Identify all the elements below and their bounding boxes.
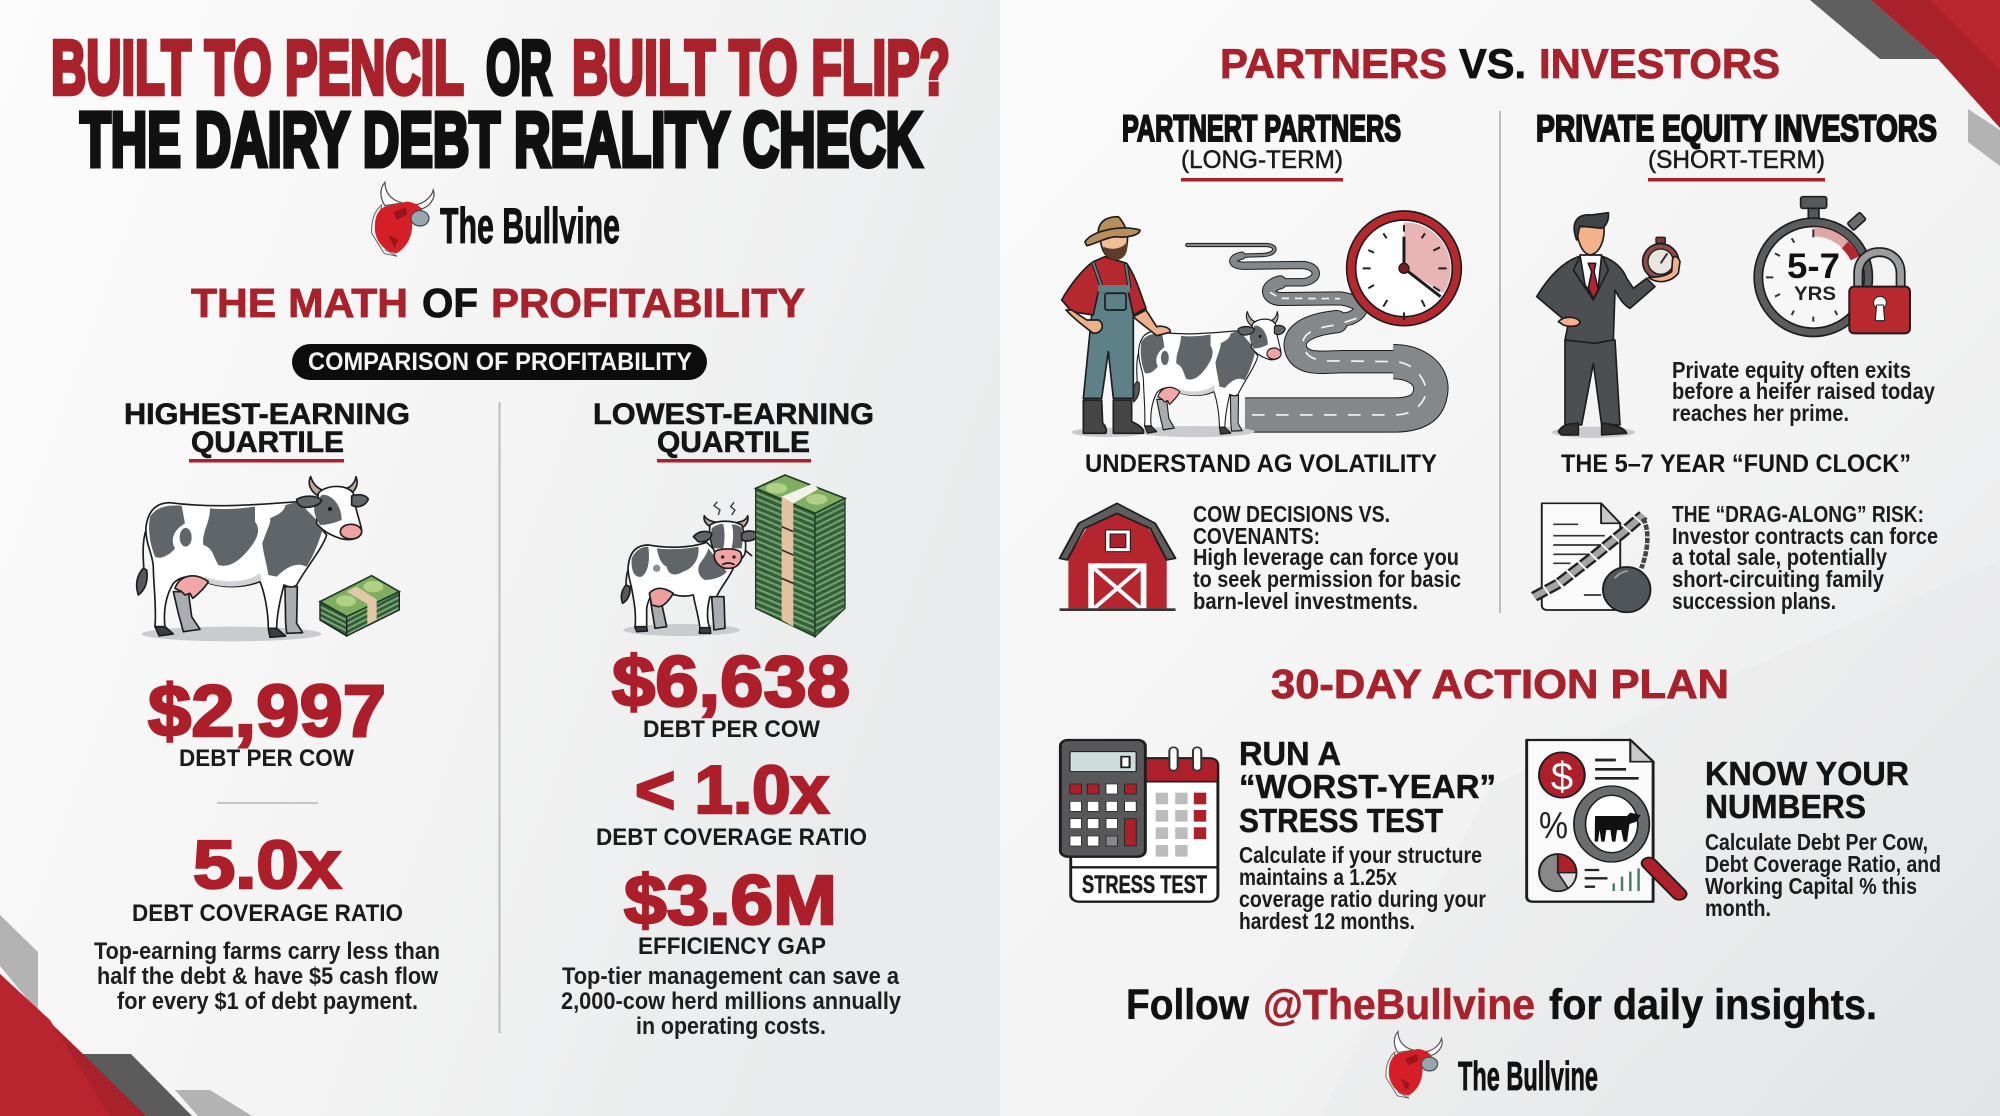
stat: debt coverage ratio under 1.0x: < 1.0x [635, 752, 829, 828]
title: BUILT TO PENCIL [51, 25, 464, 111]
logo: The Bullvine (top) [372, 182, 620, 256]
text: stress test description: Calculate if your structure [1239, 842, 1482, 868]
text: stress test description: coverage ratio during your [1239, 886, 1486, 912]
panel: lowest-earning quartile [561, 398, 902, 1040]
background: left panel [0, 0, 1000, 1116]
text: top-tier management explanation [561, 963, 902, 1040]
stat: debt coverage ratio under 1.0x [596, 752, 867, 851]
column heading: highest-earning quartile [124, 398, 410, 462]
text: private equity exit note: reaches her prime. [1672, 400, 1849, 426]
text: the drag-along risk: succession plans. [1672, 588, 1836, 614]
heading: 30-day action plan: 30-DAY ACTION PLAN [1271, 661, 1729, 707]
icon: red barn [1060, 503, 1176, 611]
heading: the math of profitability: THE MATH [191, 280, 408, 326]
text: cow decisions vs. covenants [1193, 501, 1461, 614]
icon: report with magnifier: $ [1551, 755, 1573, 799]
heading: partners vs. investors [1220, 40, 1780, 87]
icon: report with magnifier [1527, 740, 1679, 902]
icon: padlock [1849, 252, 1910, 333]
text: top-earning farms explanation [94, 938, 440, 1015]
text: the drag-along risk: short-circuiting family [1672, 566, 1884, 592]
panel: highest-earning quartile [94, 398, 440, 1015]
heading: know your numbers: NUMBERS [1705, 788, 1866, 825]
text: know your numbers description [1705, 829, 1941, 921]
stat: debt per cow $2,997: $2,997 [148, 671, 386, 752]
heading: partners vs. investors: VS. [1459, 40, 1526, 87]
column heading: highest-earning quartile: HIGHEST-EARNING [124, 398, 410, 431]
stat: debt per cow $6,638: $6,638 [612, 643, 850, 722]
heading: the math of profitability: OF [422, 280, 478, 326]
heading: know your numbers: KNOW YOUR [1705, 755, 1909, 792]
logo: The Bullvine (bottom) [1386, 1032, 1598, 1099]
column heading: lowest-earning quartile [593, 398, 874, 462]
text: the drag-along risk [1672, 501, 1938, 614]
column heading: private equity investors short-term [1536, 108, 1937, 182]
text: top-earning farms explanation: for every $1 of debt payment. [117, 988, 418, 1015]
illustration: farmer [1062, 217, 1170, 437]
text: top-earning farms explanation: Top-earning farms carry less than [94, 938, 440, 965]
text: know your numbers description: Debt Coverage Ratio, and [1705, 851, 1941, 877]
heading: the math of profitability [191, 280, 805, 326]
text: stress test description: maintains a 1.25x [1239, 864, 1397, 890]
text: cow decisions vs. covenants: barn-level investments. [1193, 588, 1418, 614]
column heading: partners long-term [1122, 108, 1401, 182]
corner decoration: bottom left [0, 915, 252, 1116]
text: top-earning farms explanation: half the debt & have $5 cash flow [97, 963, 438, 990]
call to action: follow the bullvine: @TheBullvine [1263, 981, 1535, 1029]
corner decoration: top right [1810, 0, 2000, 166]
pill label: comparison of profitability: COMPARISON OF PROFITABILITY [308, 348, 692, 376]
illustration: businessman with stopwatch [1537, 213, 1680, 438]
title: BUILT TO FLIP? [572, 25, 950, 111]
illustration: winding road [1187, 245, 1431, 415]
text: private equity exit note: before a heifer raised today [1672, 378, 1935, 404]
illustration: 5-7 year stopwatch [1758, 197, 1868, 332]
text: cow decisions vs. covenants: COVENANTS: [1193, 523, 1320, 549]
logo: The Bullvine (bottom): The Bullvine [1458, 1053, 1598, 1099]
text: stress test description [1239, 842, 1486, 934]
heading: the math of profitability: PROFITABILITY [491, 280, 805, 326]
column heading: partners long-term: PARTNERT PARTNERS [1122, 108, 1401, 149]
text: private equity exit note: Private equity often exits [1672, 357, 1911, 383]
heading: partners vs. investors: PARTNERS [1220, 40, 1447, 87]
column heading: highest-earning quartile: QUARTILE [191, 426, 344, 459]
icon: calculator and calendar: STRESS TEST [1082, 871, 1207, 899]
heading: run a worst-year stress test: “WORST-YEAR” [1239, 768, 1496, 805]
text: the drag-along risk: THE “DRAG-ALONG” RISK: [1672, 501, 1924, 527]
stat: debt coverage ratio under 1.0x: DEBT COVERAGE RATIO [596, 824, 867, 851]
stat: efficiency gap $3.6M: EFFICIENCY GAP [638, 933, 826, 960]
text: cow decisions vs. covenants: COW DECISIONS VS. [1193, 501, 1390, 527]
icon: calculator and calendar [1060, 740, 1218, 902]
illustration: 5-7 year stopwatch: 5-7 [1787, 247, 1840, 286]
title [51, 25, 950, 183]
action item: worst-year stress test [1060, 735, 1496, 934]
text: cow decisions vs. covenants: to seek permission for basic [1193, 566, 1461, 592]
text: cow decisions vs. covenants: High leverage can force you [1193, 544, 1459, 570]
stat: efficiency gap $3.6M: $3.6M [624, 861, 837, 939]
heading: run a worst-year stress test: STRESS TEST [1239, 802, 1443, 839]
illustration: 5-7 year stopwatch: YRS [1794, 284, 1836, 305]
background: right panel [1000, 0, 2000, 1116]
text: private equity exit note [1672, 357, 1935, 426]
text: top-tier management explanation: in operating costs. [636, 1013, 826, 1040]
illustration: cow [137, 477, 368, 641]
text: top-tier management explanation: 2,000-cow herd millions annually [561, 988, 902, 1015]
text: know your numbers description: month. [1705, 895, 1771, 921]
label: understand ag volatility: UNDERSTAND AG VOLATILITY [1085, 450, 1437, 478]
stat: debt per cow $2,997: DEBT PER COW [179, 745, 354, 772]
text: stress test description: hardest 12 months. [1239, 908, 1415, 934]
illustration: cow beside farmer [1132, 312, 1285, 437]
column heading: lowest-earning quartile: LOWEST-EARNING [593, 398, 874, 431]
title: THE DAIRY DEBT REALITY CHECK [80, 97, 922, 183]
heading: know your numbers [1705, 755, 1909, 825]
call to action: follow the bullvine [1126, 981, 1877, 1029]
text: the drag-along risk: Investor contracts can force [1672, 523, 1938, 549]
panel: short-term private equity investors [1534, 108, 1938, 614]
column heading: lowest-earning quartile: QUARTILE [657, 426, 810, 459]
stat: debt coverage ratio 5.0x [132, 827, 403, 927]
text: know your numbers description: Calculate Debt Per Cow, [1705, 829, 1928, 855]
column heading: private equity investors short-term: (SHORT-TERM) [1648, 146, 1825, 174]
heading: run a worst-year stress test: RUN A [1239, 735, 1341, 772]
icon: small cash stack [320, 576, 399, 636]
stat: debt per cow $6,638: DEBT PER COW [643, 716, 820, 743]
action item: know your numbers [1527, 740, 1941, 921]
icon: report with magnifier: % [1539, 805, 1568, 847]
text: know your numbers description: Working Capital % this [1705, 873, 1917, 899]
label: the 5-7 year fund clock: THE 5–7 YEAR “FUND CLOCK” [1561, 450, 1911, 478]
heading: run a worst-year stress test [1239, 735, 1496, 839]
column heading: partners long-term: (LONG-TERM) [1181, 146, 1343, 174]
text: top-tier management explanation: Top-tier management can save a [562, 963, 900, 990]
title: OR [486, 25, 552, 111]
panel: long-term partners [1060, 108, 1461, 614]
icon: contract with chain and ball [1534, 503, 1650, 612]
illustration: clock [1347, 211, 1461, 326]
call to action: follow the bullvine: Follow [1126, 981, 1249, 1029]
illustration: stressed cow [621, 502, 759, 636]
stat: debt coverage ratio 5.0x: 5.0x [193, 827, 341, 903]
icon: tall cash stack [756, 475, 845, 637]
stat: debt coverage ratio 5.0x: DEBT COVERAGE RATIO [132, 900, 403, 927]
text: the drag-along risk: a total sale, potentially [1672, 544, 1887, 570]
call to action: follow the bullvine: for daily insights. [1549, 981, 1877, 1029]
logo: The Bullvine (top): The Bullvine [440, 198, 620, 254]
heading: partners vs. investors: INVESTORS [1539, 40, 1780, 87]
